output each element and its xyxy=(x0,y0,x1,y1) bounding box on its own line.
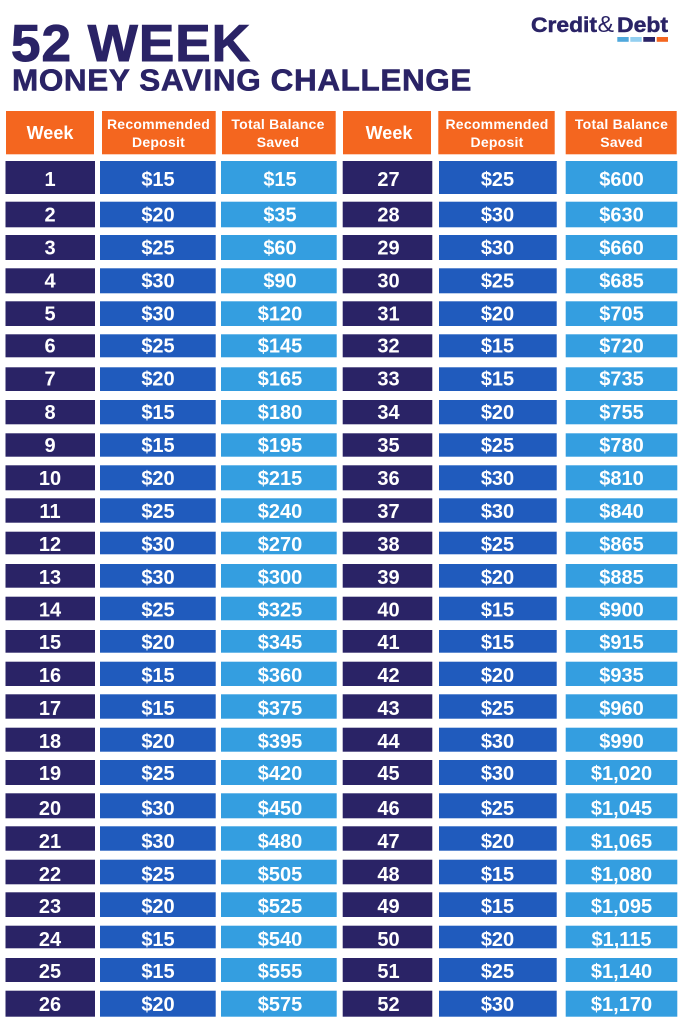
row: week 33: $735 xyxy=(599,368,644,390)
row: week 38: $865 xyxy=(599,534,644,556)
row: week 33: 33 xyxy=(377,368,400,390)
row: week 22: $505 xyxy=(258,864,302,886)
row: week 23 xyxy=(6,892,337,918)
row: week 13: 13 xyxy=(39,567,61,589)
row: week 18: $395 xyxy=(258,731,302,753)
row: week 45 xyxy=(343,760,677,785)
row: week 44: $30 xyxy=(481,731,514,753)
row: week 18: 18 xyxy=(39,731,61,753)
row: week 23: $525 xyxy=(258,896,302,918)
row: week 41: 41 xyxy=(377,632,400,654)
row: week 38 xyxy=(343,532,677,556)
row: week 29: $660 xyxy=(599,238,644,260)
row: week 15: $20 xyxy=(141,632,175,654)
row: week 5: 5 xyxy=(44,304,56,326)
row: week 45: $1,020 xyxy=(591,763,652,785)
row: week 13: $300 xyxy=(258,567,302,589)
row: week 14: $25 xyxy=(141,600,175,622)
row: week 21: 21 xyxy=(39,831,61,853)
row: week 13 xyxy=(6,564,337,589)
row: week 32: 32 xyxy=(377,336,400,358)
row: week 8 xyxy=(6,400,337,424)
logo: Credit and Debt: & xyxy=(598,11,614,37)
row: week 24: $540 xyxy=(258,929,302,951)
row: week 3: 3 xyxy=(44,238,56,260)
row: week 40: $15 xyxy=(481,600,514,622)
row: week 31: $20 xyxy=(481,304,514,326)
row: week 42: 42 xyxy=(377,665,400,687)
row: week 50: $20 xyxy=(481,929,514,951)
row: week 41 xyxy=(343,630,677,654)
row: week 35: 35 xyxy=(377,435,400,457)
row: week 31 xyxy=(343,301,677,326)
row: week 2: 2 xyxy=(44,204,56,226)
row: week 30 xyxy=(343,268,677,293)
row: week 42: $935 xyxy=(599,665,644,687)
row: week 4: 4 xyxy=(44,270,56,292)
row: week 34 xyxy=(343,400,677,424)
row: week 28: $30 xyxy=(481,204,514,226)
row: week 6: $145 xyxy=(258,336,302,358)
row: week 31: 31 xyxy=(377,304,400,326)
row: week 11 xyxy=(6,498,337,523)
row: week 43: $25 xyxy=(481,698,514,720)
row: week 34: $755 xyxy=(599,402,644,424)
row: week 36 xyxy=(343,465,677,490)
row: week 16 xyxy=(6,662,337,687)
row: week 33: $15 xyxy=(481,368,514,390)
row: week 46: $25 xyxy=(481,798,514,820)
row: week 52: $1,170 xyxy=(591,994,652,1016)
row: week 19: $420 xyxy=(258,763,302,785)
row: week 6 xyxy=(6,334,337,358)
row: week 21: $480 xyxy=(258,831,302,853)
row: week 29: 29 xyxy=(377,238,400,260)
row: week 11: 11 xyxy=(39,501,61,523)
row: week 1: $15 xyxy=(141,169,175,191)
table header: left: Saved xyxy=(257,134,299,150)
row: week 10: $215 xyxy=(258,468,302,490)
row: week 44: 44 xyxy=(377,731,400,753)
row: week 46: 46 xyxy=(377,798,400,820)
row: week 9: $195 xyxy=(258,435,302,457)
row: week 24: 24 xyxy=(39,929,62,951)
row: week 5: $30 xyxy=(141,304,175,326)
row: week 26: $575 xyxy=(258,994,302,1016)
row: week 9 xyxy=(6,433,337,457)
row: week 40: $900 xyxy=(599,600,644,622)
row: week 12: $270 xyxy=(258,534,302,556)
row: week 20: 20 xyxy=(39,798,61,820)
row: week 51: $25 xyxy=(481,961,514,983)
row: week 3: $60 xyxy=(263,238,297,260)
row: week 42 xyxy=(343,662,677,687)
row: week 26: $20 xyxy=(141,994,175,1016)
row: week 51: $1,140 xyxy=(591,961,652,983)
table header: right: Deposit xyxy=(470,134,524,150)
row: week 35: $25 xyxy=(481,435,514,457)
row: week 10: 10 xyxy=(39,468,61,490)
row: week 48 xyxy=(343,860,677,886)
row: week 18 xyxy=(6,728,337,753)
row: week 37: $840 xyxy=(599,501,644,523)
table header: left: Total Balance xyxy=(231,116,325,132)
row: week 31: $705 xyxy=(599,304,644,326)
row: week 35 xyxy=(343,433,677,457)
row: week 51: 51 xyxy=(377,961,400,983)
row: week 27: 27 xyxy=(377,169,400,191)
row: week 49 xyxy=(343,892,677,918)
row: week 52 xyxy=(343,991,677,1017)
row: week 33 xyxy=(343,367,677,391)
row: week 27: $25 xyxy=(481,169,514,191)
row: week 46 xyxy=(343,793,677,820)
row: week 15: 15 xyxy=(39,632,61,654)
row: week 49: $15 xyxy=(481,896,514,918)
row: week 21: $30 xyxy=(141,831,175,853)
row: week 15 xyxy=(6,630,337,654)
row: week 34: 34 xyxy=(377,402,400,424)
row: week 1: $15 xyxy=(263,169,297,191)
row: week 10 xyxy=(6,465,337,490)
row: week 26: 26 xyxy=(39,994,61,1016)
row: week 25: $15 xyxy=(141,961,175,983)
row: week 11: $240 xyxy=(258,501,302,523)
row: week 13: $30 xyxy=(141,567,175,589)
row: week 39 xyxy=(343,564,677,589)
row: week 5 xyxy=(6,301,337,326)
table header: right: Saved xyxy=(600,134,643,150)
row: week 23: $20 xyxy=(141,896,175,918)
row: week 38: $25 xyxy=(481,534,514,556)
row: week 7: $20 xyxy=(141,368,175,390)
row: week 3 xyxy=(6,235,337,260)
row: week 41: $15 xyxy=(481,632,514,654)
row: week 20: $30 xyxy=(141,798,175,820)
logo: Credit and Debt xyxy=(531,11,668,42)
row: week 25 xyxy=(6,958,337,983)
row: week 3: $25 xyxy=(141,238,175,260)
row: week 14 xyxy=(6,597,337,622)
row: week 44 xyxy=(343,728,677,753)
row: week 28: 28 xyxy=(377,204,400,226)
row: week 47: $1,065 xyxy=(591,831,652,853)
row: week 25: $555 xyxy=(258,961,302,983)
row: week 52: $30 xyxy=(481,994,514,1016)
row: week 42: $20 xyxy=(481,665,514,687)
row: week 11: $25 xyxy=(141,501,175,523)
table: weeks 27 to 52 xyxy=(343,161,677,1017)
row: week 41: $915 xyxy=(599,632,644,654)
row: week 43: 43 xyxy=(377,698,400,720)
row: week 29: $30 xyxy=(481,238,514,260)
row: week 20 xyxy=(6,793,337,820)
row: week 28: $630 xyxy=(599,204,644,226)
row: week 30: $25 xyxy=(481,270,514,292)
row: week 1: 1 xyxy=(44,169,56,191)
row: week 47 xyxy=(343,826,677,853)
row: week 24: $15 xyxy=(141,929,175,951)
row: week 28 xyxy=(343,202,677,227)
row: week 19: $25 xyxy=(141,763,175,785)
row: week 5: $120 xyxy=(258,304,302,326)
row: week 24 xyxy=(6,926,337,951)
table header: right: Total Balance xyxy=(575,116,668,132)
logo: Credit and Debt: Debt xyxy=(617,13,668,37)
row: week 49: $1,095 xyxy=(591,896,652,918)
table header: right: Week xyxy=(366,123,413,143)
table header: left: Week xyxy=(27,123,74,143)
row: week 32: $15 xyxy=(481,336,514,358)
row: week 30: $685 xyxy=(599,270,644,292)
row: week 36: $810 xyxy=(599,468,644,490)
row: week 48: $1,080 xyxy=(591,864,652,886)
table header: right xyxy=(343,111,677,154)
row: week 22: $25 xyxy=(141,864,175,886)
row: week 39: $885 xyxy=(599,567,644,589)
row: week 48: $15 xyxy=(481,864,514,886)
row: week 26 xyxy=(6,991,337,1017)
table header: left: Recommended xyxy=(107,116,210,132)
row: week 51 xyxy=(343,958,677,983)
table header: right: Recommended xyxy=(445,116,549,132)
row: week 18: $20 xyxy=(141,731,175,753)
row: week 50: $1,115 xyxy=(591,929,652,951)
row: week 12 xyxy=(6,532,337,556)
row: week 21 xyxy=(6,826,337,853)
row: week 14: $325 xyxy=(258,600,302,622)
row: week 2: $35 xyxy=(263,204,297,226)
row: week 22 xyxy=(6,860,337,886)
row: week 32 xyxy=(343,334,677,358)
row: week 49: 49 xyxy=(377,896,400,918)
table header: left xyxy=(6,111,336,154)
table header: left: Deposit xyxy=(132,134,185,150)
row: week 34: $20 xyxy=(481,402,514,424)
row: week 37 xyxy=(343,498,677,523)
row: week 46: $1,045 xyxy=(591,798,652,820)
row: week 30: 30 xyxy=(377,270,400,292)
row: week 8: $15 xyxy=(141,402,175,424)
row: week 39: 39 xyxy=(377,567,400,589)
row: week 27: $600 xyxy=(599,169,644,191)
row: week 19 xyxy=(6,760,337,785)
row: week 50 xyxy=(343,926,677,951)
logo: Credit and Debt: Credit xyxy=(531,13,597,37)
row: week 25: 25 xyxy=(39,961,61,983)
row: week 36: $30 xyxy=(481,468,514,490)
row: week 4 xyxy=(6,268,337,293)
row: week 23: 23 xyxy=(39,896,61,918)
row: week 32: $720 xyxy=(599,336,644,358)
row: week 4: $30 xyxy=(141,270,175,292)
row: week 52: 52 xyxy=(377,994,400,1016)
row: week 19: 19 xyxy=(39,763,61,785)
row: week 6: $25 xyxy=(141,336,175,358)
row: week 7: 7 xyxy=(44,368,56,390)
row: week 20: $450 xyxy=(258,798,302,820)
row: week 16: 16 xyxy=(39,665,61,687)
row: week 50: 50 xyxy=(377,929,400,951)
row: week 37: $30 xyxy=(481,501,514,523)
row: week 8: $180 xyxy=(258,402,302,424)
row: week 17: $15 xyxy=(141,698,175,720)
row: week 10: $20 xyxy=(141,468,175,490)
row: week 17: $375 xyxy=(258,698,302,720)
row: week 37: 37 xyxy=(377,501,400,523)
row: week 8: 8 xyxy=(44,402,56,424)
row: week 38: 38 xyxy=(377,534,400,556)
table: weeks 1 to 26 xyxy=(6,161,337,1017)
row: week 14: 14 xyxy=(39,600,62,622)
row: week 45: $30 xyxy=(481,763,514,785)
row: week 48: 48 xyxy=(377,864,400,886)
row: week 40 xyxy=(343,597,677,622)
row: week 12: $30 xyxy=(141,534,175,556)
row: week 9: $15 xyxy=(141,435,175,457)
row: week 39: $20 xyxy=(481,567,514,589)
row: week 22: 22 xyxy=(39,864,61,886)
row: week 43: $960 xyxy=(599,698,644,720)
row: week 16: $15 xyxy=(141,665,175,687)
row: week 17: 17 xyxy=(39,698,61,720)
row: week 2: $20 xyxy=(141,204,175,226)
row: week 47: $20 xyxy=(481,831,514,853)
row: week 45: 45 xyxy=(377,763,400,785)
row: week 7 xyxy=(6,367,337,391)
row: week 44: $990 xyxy=(599,731,644,753)
row: week 43 xyxy=(343,694,677,720)
subtitle: money saving challenge: MONEY SAVING CHALLENGE xyxy=(12,64,472,98)
row: week 29 xyxy=(343,235,677,260)
row: week 36: 36 xyxy=(377,468,400,490)
row: week 40: 40 xyxy=(377,600,400,622)
row: week 16: $360 xyxy=(258,665,302,687)
row: week 4: $90 xyxy=(263,270,297,292)
row: week 9: 9 xyxy=(44,435,56,457)
row: week 47: 47 xyxy=(377,831,400,853)
row: week 7: $165 xyxy=(258,368,302,390)
row: week 6: 6 xyxy=(44,336,56,358)
row: week 27 xyxy=(343,161,677,194)
row: week 12: 12 xyxy=(39,534,61,556)
row: week 1 xyxy=(6,161,337,194)
title: 52 week: 52 WEEK xyxy=(11,15,251,73)
row: week 17 xyxy=(6,694,337,720)
row: week 2 xyxy=(6,202,337,227)
row: week 15: $345 xyxy=(258,632,302,654)
row: week 35: $780 xyxy=(599,435,644,457)
